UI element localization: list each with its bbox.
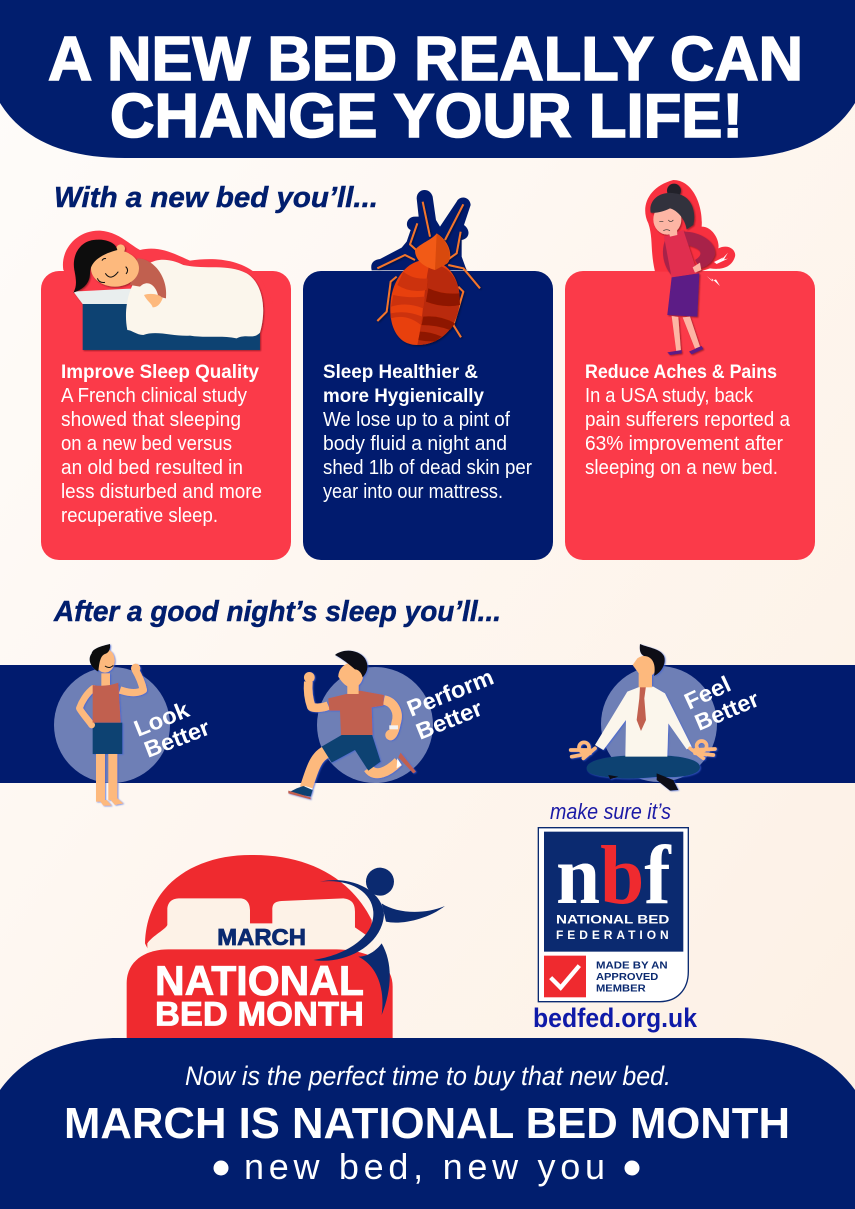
logo text: BED MONTH xyxy=(155,995,364,1033)
logo: march national bed month xyxy=(127,855,445,1038)
text: improve sleep quality: Improve Sleep Quality xyxy=(61,361,259,383)
footer slogan: new bed, new you xyxy=(244,1146,605,1187)
text: reduce aches xyxy=(585,361,791,479)
text: improve sleep quality: less disturbed and more xyxy=(61,481,262,503)
label: perform better: Perform xyxy=(403,663,497,722)
title: CHANGE YOUR LIFE! xyxy=(110,82,743,151)
logo text: MARCH xyxy=(217,924,306,950)
title: A NEW BED REALLY CAN xyxy=(48,25,803,94)
text: improve sleep quality: A French clinical study xyxy=(61,385,247,407)
text: sleep healthier xyxy=(323,361,532,503)
figure: look better xyxy=(54,644,213,806)
federation name: FEDERATION xyxy=(556,928,669,942)
label: feel better: Better xyxy=(691,685,763,736)
text: sleep healthier: Sleep Healthier & xyxy=(323,361,478,383)
label: look better xyxy=(130,696,213,763)
approved member text: MEMBER xyxy=(596,984,646,995)
logo text: NATIONAL xyxy=(155,957,364,1004)
text: sleep healthier: We lose up to a pint of xyxy=(323,409,510,431)
footer banner xyxy=(0,1038,855,1209)
text: sleep healthier: shed 1lb of dead skin per xyxy=(323,457,532,479)
text: make sure it's: make sure it’s xyxy=(550,799,671,824)
heading: with a new bed: With a new bed you’ll... xyxy=(54,182,378,214)
text: reduce aches: sleeping on a new bed. xyxy=(585,457,778,479)
icon: bed bug xyxy=(371,190,480,345)
label: perform better: Better xyxy=(412,695,486,745)
text: improve sleep quality: recuperative sleep. xyxy=(61,505,218,527)
text: reduce aches: 63% improvement after xyxy=(585,433,783,455)
footer headline: MARCH IS NATIONAL BED MONTH xyxy=(64,1099,790,1148)
text: improve sleep quality: an old bed resulted in xyxy=(61,457,243,479)
panel: sleep healthier xyxy=(303,190,553,560)
figure: perform better xyxy=(288,651,497,799)
header banner xyxy=(0,0,855,158)
federation name: NATIONAL BED xyxy=(556,913,670,927)
panel: reduce aches xyxy=(565,180,815,560)
text: website: bedfed.org.uk xyxy=(533,1003,698,1033)
panel: benefits band xyxy=(0,644,855,806)
logo figure xyxy=(313,868,445,1015)
panel: improve sleep quality xyxy=(41,231,291,560)
footer tagline: Now is the perfect time to buy that new bed. xyxy=(185,1061,671,1091)
approved member text: APPROVED xyxy=(596,972,658,983)
icon: woman with back pain xyxy=(645,180,735,355)
approved member text: MADE BY AN xyxy=(596,960,668,971)
label: perform better xyxy=(403,663,497,745)
label: look better: Look xyxy=(130,696,193,742)
text: sleep healthier: more Hygienically xyxy=(323,385,484,407)
title xyxy=(48,25,803,151)
nbf wordmark: nbf xyxy=(556,830,672,922)
text: reduce aches: Reduce Aches & Pains xyxy=(585,361,777,383)
text: improve sleep quality: on a new bed versus xyxy=(61,433,232,455)
label: feel better xyxy=(680,671,763,736)
approved member text xyxy=(596,960,668,995)
text: improve sleep quality xyxy=(61,361,262,527)
figure: feel better xyxy=(571,644,763,791)
text: improve sleep quality: showed that sleeping xyxy=(61,409,241,431)
text: sleep healthier: year into our mattress. xyxy=(323,481,503,503)
icon: person sleeping in bed xyxy=(63,231,273,350)
label: feel better: Feel xyxy=(680,671,735,715)
text: reduce aches: pain sufferers reported a xyxy=(585,409,791,431)
logo: national bed federation badge xyxy=(538,828,688,1002)
federation name xyxy=(556,913,670,942)
text: sleep healthier: body fluid a night and xyxy=(323,433,507,455)
text: reduce aches: In a USA study, back xyxy=(585,385,754,407)
heading: after a good night's sleep: After a good night’s sleep you’ll... xyxy=(53,596,501,628)
logo text xyxy=(155,924,364,1033)
approved member tick xyxy=(544,956,586,997)
label: look better: Better xyxy=(140,714,213,763)
